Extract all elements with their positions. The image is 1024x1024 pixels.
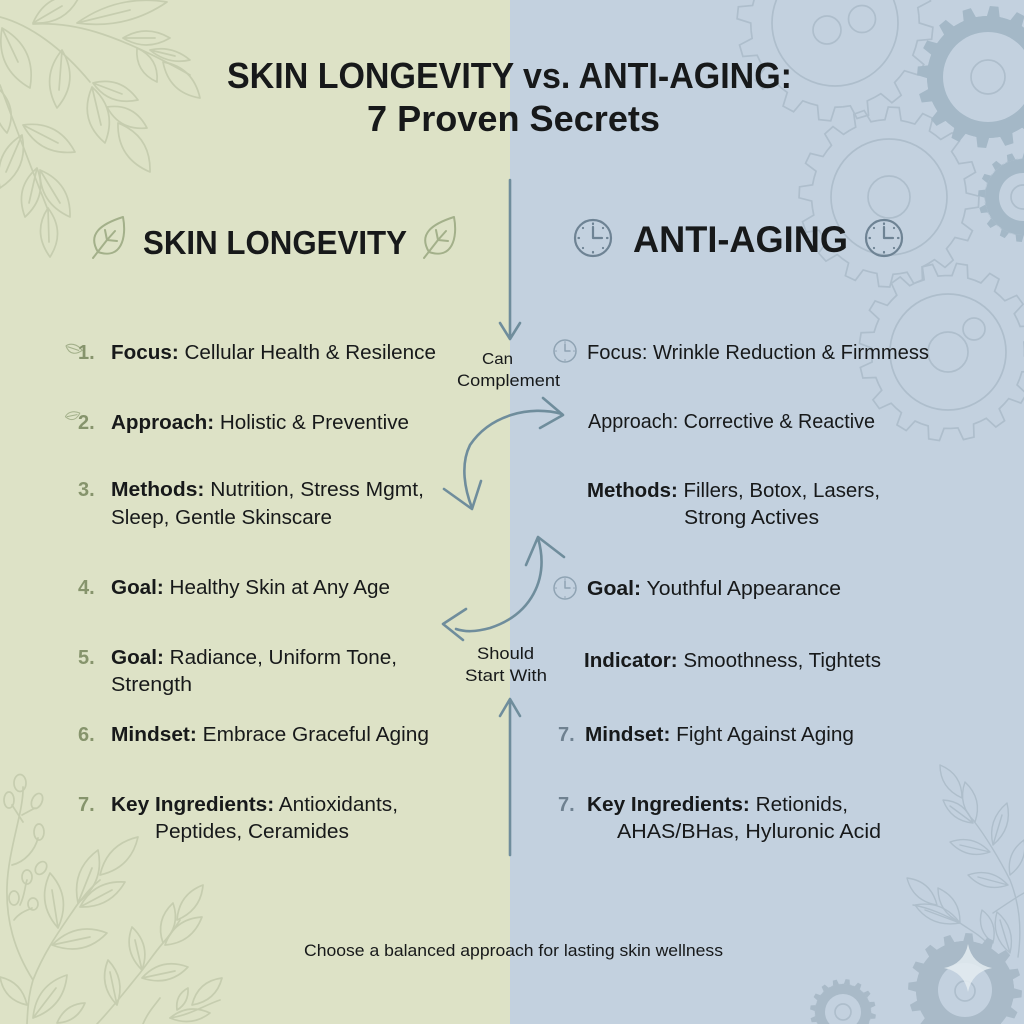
item 2: approach: Approach: Holistic & Preventive bbox=[111, 412, 409, 434]
item: key ingredients: Key Ingredients: Retionids, bbox=[587, 794, 848, 816]
item 3: methods: Sleep, Gentle Skinscare bbox=[111, 507, 332, 529]
item: mindset: 7. bbox=[558, 724, 575, 746]
item: indicator: Indicator: Smoothness, Tightets bbox=[584, 650, 881, 672]
heading: skin longevity with leaf icons bbox=[93, 217, 455, 261]
item: key ingredients: AHAS/BHas, Hyluronic Acid bbox=[617, 821, 881, 843]
decoration: solid gear bottom right bbox=[904, 929, 1024, 1024]
decoration: solid gear top right bbox=[911, 0, 1024, 154]
item 6: mindset: Mindset: Embrace Graceful Aging bbox=[111, 724, 429, 746]
left list: skin longevity items bbox=[65, 342, 436, 843]
item 5: goal: 5. bbox=[78, 647, 95, 669]
title: 7 Proven Secrets bbox=[367, 98, 660, 139]
decoration: sparkle star bbox=[944, 944, 992, 992]
decoration: small solid gear bottom bbox=[806, 975, 880, 1024]
title: SKIN LONGEVITY vs. ANTI-AGING: bbox=[227, 55, 792, 96]
item 6: mindset: 6. bbox=[78, 724, 95, 746]
item 1: focus: Focus: Cellular Health & Resilence bbox=[111, 342, 436, 364]
item: methods: Methods: Fillers, Botox, Lasers, bbox=[587, 480, 880, 502]
right panel background: anti-aging bbox=[510, 0, 1024, 1024]
connector label: can complement bbox=[457, 351, 560, 390]
heading: anti-aging with clock icons: ANTI-AGING bbox=[633, 219, 848, 260]
item: goal: Goal: Youthful Appearance bbox=[587, 578, 841, 600]
connector label: should start with bbox=[465, 644, 547, 685]
item 3: methods: Methods: Nutrition, Stress Mgmt, bbox=[111, 479, 424, 501]
item 5: goal: Goal: Radiance, Uniform Tone, bbox=[111, 647, 397, 669]
decoration: small solid gear right edge bbox=[974, 148, 1024, 246]
item: approach: Approach: Corrective & Reactive bbox=[588, 411, 875, 433]
item: mindset: Mindset: Fight Against Aging bbox=[585, 724, 854, 746]
icon: left clock bbox=[575, 220, 611, 256]
item: methods: Strong Actives bbox=[684, 507, 819, 529]
right list: anti-aging items bbox=[554, 340, 929, 843]
decoration: bottom-left leaf branches with buds bbox=[0, 774, 222, 1024]
icon: left leaf bbox=[93, 217, 124, 258]
icon: right leaf bbox=[424, 217, 455, 258]
footer note: Choose a balanced approach for lasting skin wellness bbox=[304, 941, 723, 960]
connector label: can complement: Complement bbox=[457, 371, 560, 390]
central arrow from bottom bbox=[500, 699, 520, 855]
title bbox=[227, 55, 792, 139]
left panel background: skin longevity bbox=[0, 0, 510, 1024]
item 3: methods bbox=[78, 479, 424, 529]
item 7: key ingredients: Peptides, Ceramides bbox=[155, 821, 349, 843]
connector label: can complement: Can bbox=[482, 351, 513, 368]
decoration: top-left leaf branch bbox=[0, 0, 200, 257]
item 7: key ingredients: 7. bbox=[78, 794, 95, 816]
item: key ingredients: 7. bbox=[558, 794, 575, 816]
item 3: methods: 3. bbox=[78, 479, 95, 501]
decoration: bottom-right leaf branches bbox=[907, 765, 1024, 957]
icon: right clock bbox=[866, 220, 902, 256]
item: focus: Focus: Wrinkle Reduction & Firmmess bbox=[587, 342, 929, 364]
decoration: outline gear lower bbox=[846, 250, 1024, 454]
item: methods bbox=[587, 480, 880, 529]
decoration: outline gear middle bbox=[795, 103, 983, 291]
curved arrow: should start with bbox=[443, 537, 564, 640]
heading: skin longevity with leaf icons: SKIN LONGEVITY bbox=[143, 224, 407, 261]
item 7: key ingredients bbox=[78, 794, 398, 843]
decoration: outline gear top bbox=[728, 0, 942, 130]
item 4: goal: Goal: Healthy Skin at Any Age bbox=[111, 577, 390, 599]
connector label: should start with: Start With bbox=[465, 666, 547, 685]
item 5: goal bbox=[78, 647, 397, 696]
item 1: focus: 1. bbox=[78, 342, 95, 364]
connector label: should start with: Should bbox=[477, 644, 534, 663]
item: key ingredients bbox=[558, 794, 881, 843]
central arrow from top bbox=[500, 180, 520, 339]
heading: anti-aging with clock icons bbox=[575, 219, 902, 260]
item 4: goal: 4. bbox=[78, 577, 95, 599]
item 5: goal: Strength bbox=[111, 674, 192, 696]
item 2: approach: 2. bbox=[78, 412, 95, 434]
curved arrow: can complement bbox=[444, 398, 563, 509]
item 7: key ingredients: Key Ingredients: Antioxidants, bbox=[111, 794, 398, 816]
